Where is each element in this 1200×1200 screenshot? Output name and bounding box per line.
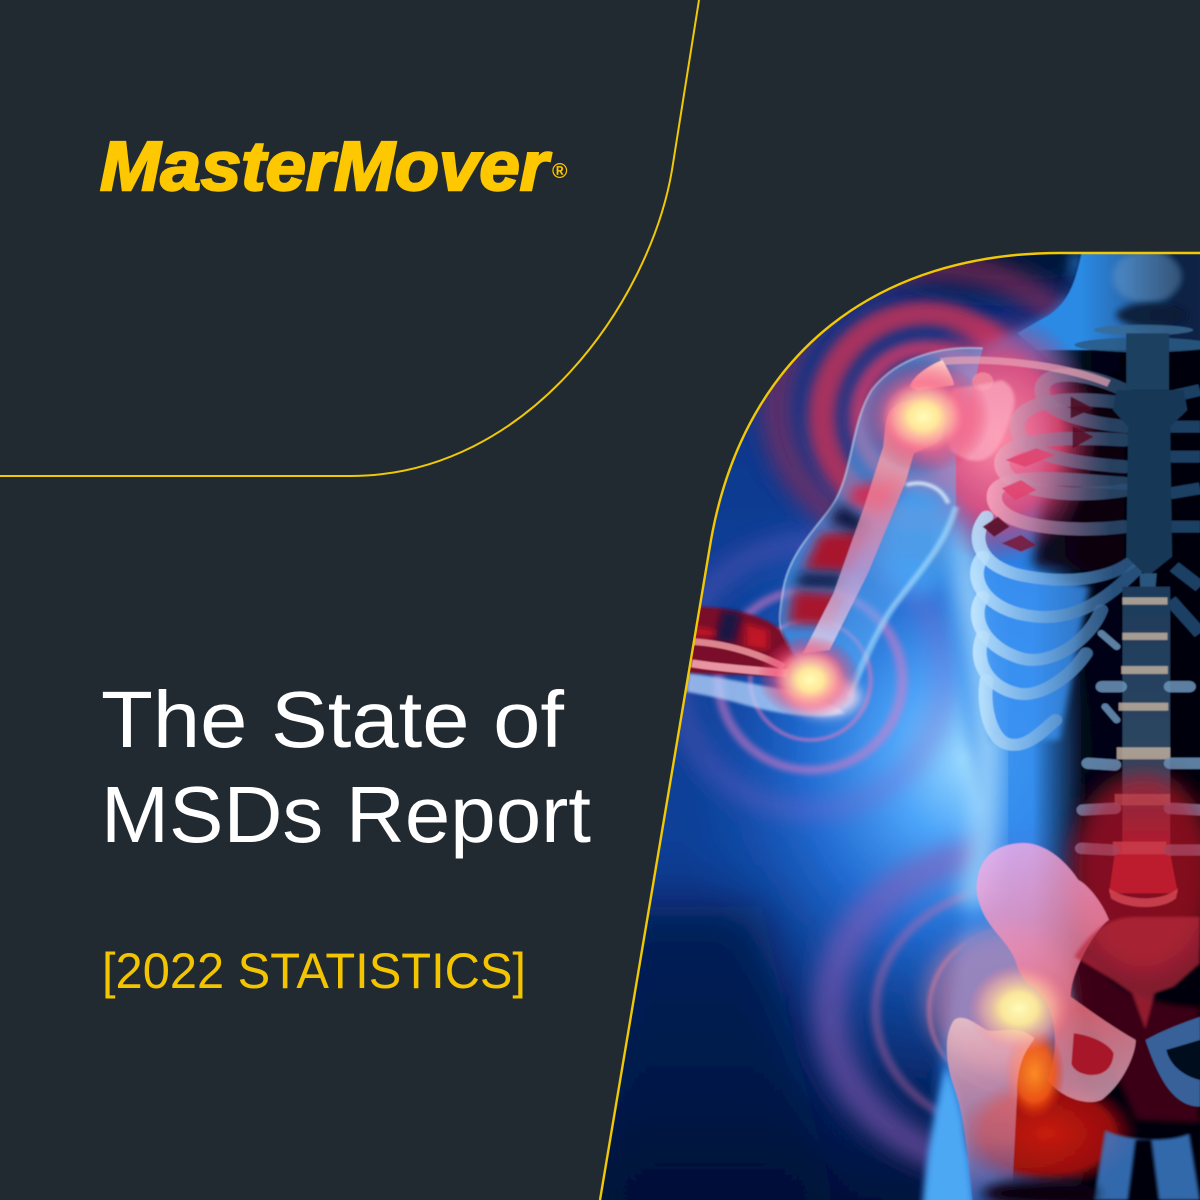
spinal discs [1109,597,1178,907]
dark backdrop behind spine [1032,350,1200,1200]
obturator hole [1071,1033,1114,1075]
title [101,675,591,859]
forearm bones [694,642,784,667]
pain rings: elbow [677,543,944,810]
femur [947,963,1071,1200]
spine and sternum [1081,333,1200,907]
subtitle: 2022 statistics: [2022 STATISTICS] [102,943,526,999]
orange hip glow [1004,1027,1065,1120]
pain rings: hip [830,850,1200,1170]
neck [1017,250,1200,387]
groin [1094,1130,1200,1200]
lower thorax fill [979,560,1090,740]
transverse processes [1081,633,1200,850]
ribs: right side [1170,390,1200,633]
torso body [925,250,1200,1200]
humerus bone [803,400,945,653]
dark muscle band [795,503,868,588]
neck vertebrae [1075,250,1200,352]
muscle band red [788,477,902,627]
ribs: lower blue set [977,517,1136,745]
shoulder blade, clavicle [860,360,1109,473]
panel: anatomy illustration [592,207,1200,1200]
red chest glow [895,310,1101,563]
bright blue glow [676,498,1197,1084]
hip pink glow [925,927,1078,1073]
logo: MasterMover: ® [552,160,568,183]
sacrum [1075,917,1200,1030]
upper arm [780,348,983,707]
dark area at top of backdrop [890,254,1082,316]
axilla highlight [906,483,948,503]
title: The State of [101,675,565,764]
leg edge bright [923,1067,973,1200]
blue backdrop [592,233,1200,1200]
dark left edge [600,907,837,1200]
dark thorax shadow [1032,383,1124,573]
pelvis [977,843,1200,1200]
bright side glow [952,523,987,907]
elbow joint glow [774,648,847,712]
sacrum dark hollow [1072,955,1200,1123]
yellow outline of illustration panel [600,253,1200,1200]
curved yellow line, top-left panel [0,0,699,476]
shoulder joint glow [881,380,965,453]
title: MSDs Report [101,770,591,859]
right pelvis [1145,1017,1200,1107]
rib gaps [983,397,1094,552]
lumbar red glow [1071,773,1200,973]
shoulder glow [860,360,990,473]
inner arm glow [876,483,960,597]
pain rings: shoulder [776,267,1098,547]
logo: MasterMover: MasterMover [100,127,552,205]
ribs: upper pink set [994,375,1128,529]
hip joint glow [967,963,1071,1053]
deep red hip glow [956,1077,1140,1190]
elbow glow [757,635,860,718]
forearm [686,607,860,718]
forearm underside [686,673,845,716]
elbow highlight [791,677,860,717]
dark shadow under hip [983,1180,1098,1200]
